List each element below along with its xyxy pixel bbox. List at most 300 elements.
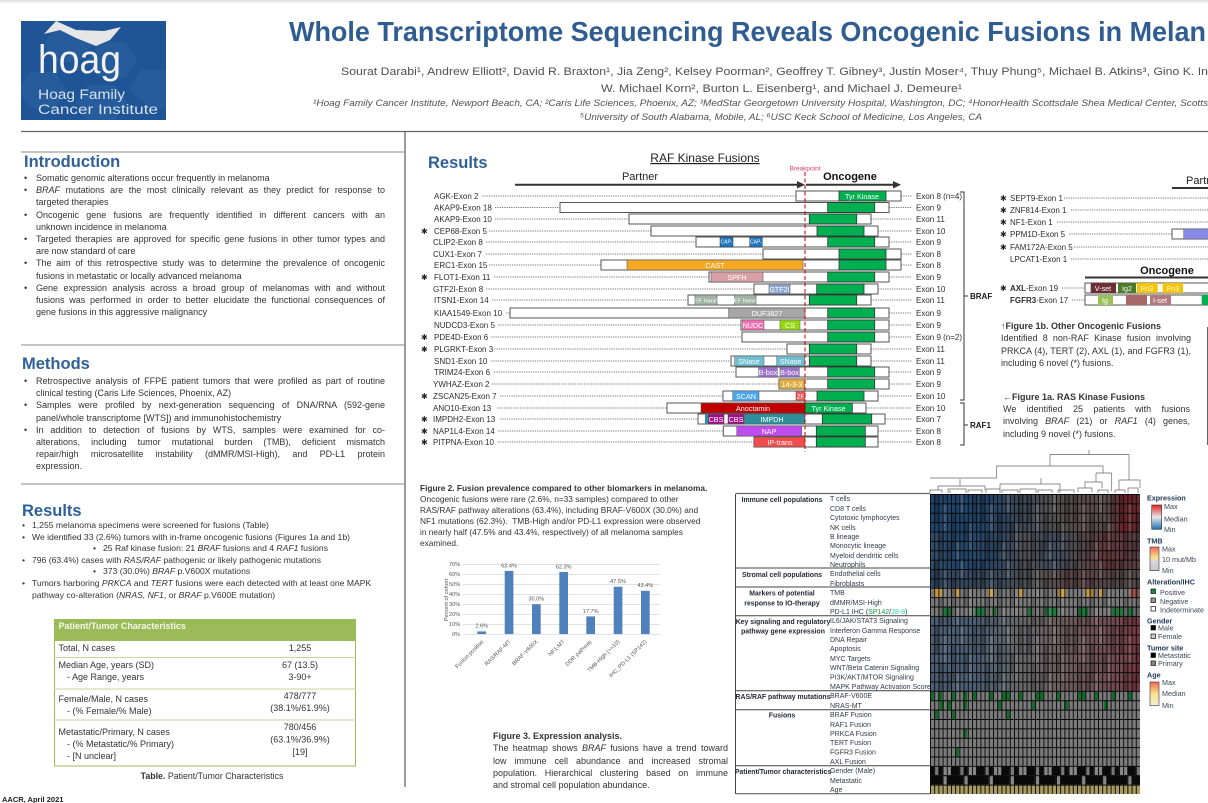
- row labels: Interferon Gamma Response: [830, 628, 920, 635]
- legend: alteration IHC: Negative: [1160, 597, 1188, 606]
- table header: Patient/Tumor Characteristics: [58, 621, 186, 631]
- fusion row: ERC1: ERC1-Exon 15: [434, 261, 488, 270]
- fusion row: AKAP9 exon 10: [434, 214, 945, 224]
- text block: figure 3 caption: and stromal cell population abundance.: [493, 780, 650, 790]
- row labels: DNA Repair: [830, 637, 868, 644]
- text block: figure 3 caption: Figure 3. Expression analysis.: [493, 731, 622, 741]
- text block: methods bullets: clinical testing (Caris Life Sciences, Phoenix, AZ): [36, 388, 231, 398]
- text block: methods bullets: panel/whole transcriptome [WTS]) and immunohistochemistry: [36, 413, 281, 423]
- fusion row: NF1: NF1-Exon 1: [1010, 218, 1053, 227]
- authors and affiliations: [313, 66, 1208, 123]
- fusion row: PDE4D: PDE4D-Exon 6: [434, 333, 489, 342]
- fusion row: PITPNA: PITPNA-Exon 10: [433, 438, 494, 447]
- category labels: [455, 639, 649, 679]
- fusion row: ZSCAN25: [421, 391, 946, 401]
- row labels: Metastatic: [830, 778, 862, 785]
- row labels: IL6/JAK/STAT3 Signaling: [830, 618, 908, 625]
- fusion row: IMPDH2: ✱: [421, 415, 428, 424]
- row: tumor site: [19]: [292, 747, 308, 757]
- text block: introduction bullets: Oncogenic gene fusions are frequently identified in different cancers with an: [36, 210, 385, 220]
- panel: heatmap row annotation table: [735, 494, 931, 794]
- legend: age: Age: [1147, 670, 1161, 680]
- fusion row: CEP68: Exon 10: [916, 227, 946, 236]
- legend: TMB: Max: [1162, 544, 1176, 554]
- fusion row: NF1: ✱: [1000, 218, 1007, 227]
- text: •: [24, 376, 27, 386]
- partner header arrow: Partner: [622, 171, 658, 183]
- text: •: [22, 578, 25, 588]
- fusion row spots: [934, 710, 1010, 756]
- row labels: Monocytic lineage: [830, 543, 886, 550]
- text block: introduction bullets: [24, 173, 385, 317]
- fusion row: TRIM24: B-box: [780, 368, 799, 377]
- y axis labels: 60%: [449, 572, 460, 578]
- fusion row: NUDCD3: NUDC: [743, 321, 763, 330]
- legend: gender: Male: [1158, 624, 1174, 632]
- fusion row: AXL: ✱: [1000, 284, 1007, 293]
- fusion row: ANO10: Anoctamin: [736, 404, 770, 413]
- text: •: [24, 210, 27, 220]
- fusion row: NAP1L4: [421, 426, 941, 436]
- PD-L1 row spots: [943, 606, 1133, 616]
- heading: Introduction: Introduction: [24, 153, 120, 171]
- legend: gender: Female: [1158, 632, 1182, 641]
- group labels: RAS/RAF pathway mutations: [736, 694, 831, 701]
- authors and affiliations: Sourat Darabi¹, Andrew Elliott², David R. Braxton¹, Jia Zeng², Kelsey Poorman², Geoffrey T. Gibney³, Justin Moser⁴, Thuy Phung⁵, Michael B. Atkins³, Gino K. In: [341, 66, 1208, 78]
- category labels: IHC_PD-L1 (SP142): [608, 639, 649, 679]
- y axis labels: 40%: [449, 592, 460, 598]
- fusion row: AXL: V-set: [1095, 284, 1111, 293]
- bar value labels: 47.5%: [610, 579, 626, 585]
- fusion row: FGFR3: [1010, 295, 1208, 305]
- row labels: B lineage: [830, 534, 859, 541]
- age row: [930, 785, 1140, 794]
- text block: introduction bullets: The aim of this retrospective study was to determine the prevalence of oncogenic: [36, 258, 385, 268]
- legend: age: [1147, 670, 1186, 710]
- fusion row: CLIP2: Exon 9: [916, 238, 941, 247]
- row labels: [830, 496, 931, 794]
- fusion row: NAP1L4: NAP1L4-Exon 14: [433, 427, 495, 436]
- legend: alteration IHC: Positive: [1160, 588, 1185, 597]
- text block: introduction bullets: targeted therapies: [36, 197, 109, 207]
- text block: results bullets: •: [93, 543, 96, 553]
- fusion row: FLOT1: ✱: [421, 273, 428, 282]
- table caption: Table. Patient/Tumor Characteristics: [141, 771, 284, 781]
- text block: figure 2 caption: Oncogenic fusions were rare (2.6%, n=33 samples) compared to other: [420, 494, 678, 504]
- legend: expression: Max: [1164, 502, 1178, 511]
- row: total: 1,255: [289, 643, 311, 653]
- fusion row: KIAA1549: DUF3827: [752, 309, 782, 318]
- text block: introduction bullets: are now standard of care: [36, 246, 136, 256]
- legend: TMB: TMB: [1147, 536, 1163, 546]
- row: median age: - Age Range, years: [67, 672, 145, 682]
- y axis labels: 10%: [449, 622, 460, 628]
- fusion row: PLGRKT: Exon 11: [916, 345, 945, 354]
- fusion row: FAM172A: [1000, 243, 1208, 252]
- row: tumor site: (63.1%/36.9%): [270, 734, 330, 744]
- text block: figure 1a caption: We identified 25 patients with fusions: [1003, 404, 1190, 414]
- y axis labels: 50%: [449, 582, 460, 588]
- legend: alteration IHC: Indeterminate: [1160, 606, 1204, 614]
- text block: figure 1b caption: including 6 novel (*) fusions.: [1001, 358, 1114, 368]
- fusion row: ANO10: Tyr Kinase: [812, 404, 845, 413]
- y axis title: Percent of cohort: [444, 578, 450, 621]
- fusion row: ANO10: ANO10-Exon 13: [433, 404, 492, 413]
- bar value labels: 43.4%: [637, 583, 653, 589]
- fusion row: SEPT9: [1000, 194, 1208, 203]
- text block: figure 1a caption: involving BRAF (21) or RAF1 (4) genes,: [1003, 416, 1190, 426]
- row labels: AXL Fusion: [830, 759, 866, 766]
- fusion row: ZNF814: ZNF814-Exon 1: [1010, 206, 1067, 215]
- fusion row: PLGRKT: PLGRKT-Exon 3: [434, 345, 494, 354]
- row: total: Total, N cases: [58, 643, 116, 653]
- legend: TMB: Min: [1162, 566, 1174, 575]
- category labels: TMB-High (>=10): [587, 639, 622, 674]
- fusion row: CUX1: Exon 8: [916, 250, 941, 259]
- category labels: NF1-MT: [548, 639, 567, 658]
- text block: methods bullets: [24, 376, 385, 471]
- text: •: [24, 425, 27, 435]
- text block: figure 1b caption: Identified 8 non-RAF Kinase fusion involving: [1001, 333, 1191, 343]
- fusion row: ZSCAN25: ZSCAN25-Exon 7: [433, 392, 497, 401]
- bar value labels: 2.6%: [475, 624, 488, 630]
- logo: Hoag Family Cancer Institute: hoag: [38, 38, 121, 82]
- fusion row: PPM1D: PPM1D-Exon 5: [1010, 230, 1066, 239]
- fusion row: AGK: Tyr Kinase: [845, 192, 879, 201]
- text block: figure 2 caption: RAS/RAF pathway alterations (63.4%), including BRAF-V600X (30.0%) and: [420, 505, 698, 515]
- row: median age: [58, 660, 318, 682]
- fusion row: SND1: SNase: [738, 357, 760, 366]
- text block: figure 3 caption: population. Hierarchical clustering based on immune: [493, 768, 728, 778]
- fusion row: AKAP9 exon 18: Exon 9: [916, 204, 941, 212]
- text block: figure 2 caption: Figure 2. Fusion prevalence compared to other biomarkers in melanoma.: [420, 483, 707, 493]
- fusion row: PDE4D: Exon 9 (n=2): [916, 333, 962, 342]
- oncogene header arrow: Oncogene: [823, 171, 877, 183]
- fusion row: CUX1: [433, 249, 941, 259]
- bar value labels: 17.7%: [583, 609, 599, 615]
- row: gender: (38.1%/61.9%): [270, 703, 330, 713]
- bar value labels: 63.4%: [501, 564, 517, 570]
- y axis labels: [449, 562, 460, 638]
- row labels: FGFR3 Fusion: [830, 750, 876, 756]
- row: gender: 478/777: [284, 691, 316, 701]
- partner header: [1172, 175, 1208, 188]
- text block: introduction bullets: fusions was performed in order to better elucidate the functional consequences of: [36, 295, 385, 305]
- text block: methods bullets: Samples were profiled by next-generation sequencing of DNA/RNA (592-gene: [36, 400, 385, 410]
- row labels: PI3K/AKT/MTOR Signaling: [830, 674, 914, 682]
- heatmap: [930, 494, 1140, 794]
- oncogene header arrow: [806, 171, 901, 188]
- text: •: [22, 532, 25, 542]
- text block: figure 2 caption: NF1 mutations (62.3%). TMB-High and/or PD-L1 expression were observed: [420, 516, 700, 526]
- row labels: BRAF Fusion: [830, 712, 872, 719]
- fusion row: ZSCAN25: Exon 10: [916, 392, 946, 401]
- legend: expression: Expression: [1147, 494, 1186, 502]
- fusion row: CLIP2: [433, 237, 941, 247]
- text block: figure 1a caption: [1003, 392, 1190, 439]
- fusion row: ANO10: [433, 403, 946, 413]
- row labels: Myeloid dendritic cells: [830, 553, 899, 560]
- category labels: Fusion-positive: [455, 639, 485, 670]
- text block: methods bullets: repair/high microsatellite instability (dMMR/MSI-High), and PD-L1 protein: [36, 449, 385, 459]
- text: •: [24, 283, 27, 293]
- group labels: response to IO-therapy: [744, 600, 820, 608]
- fusion row: ITSN1: ITSN1-Exon 14: [434, 296, 489, 305]
- heading: Methods: Methods: [22, 355, 90, 373]
- row: tumor site: Metastatic/Primary, N cases: [58, 727, 170, 737]
- fusion row: KIAA1549: KIAA1549-Exon 10: [434, 309, 503, 318]
- text block: introduction bullets: unknown incidence in melanoma: [36, 222, 167, 232]
- text block: results bullets: Tumors harboring PRKCA and TERT fusions were each detected with at least one MAPK: [32, 578, 371, 588]
- row labels: Fibroblasts: [830, 581, 865, 588]
- row: gender: - (% Female/% Male): [67, 706, 152, 716]
- text block: results bullets: [22, 520, 371, 600]
- fusion row: GTF2I: [433, 284, 946, 294]
- fusion row: ZSCAN25: SCAN: [736, 392, 756, 401]
- row labels: CD8 T cells: [830, 506, 866, 513]
- fusion row: LPCAT1: LPCAT1-Exon 1: [1010, 255, 1068, 264]
- fusion row: ZNF814: ✱: [1000, 206, 1007, 215]
- fusion row: SEPT9: ✱: [1000, 194, 1007, 203]
- text block: methods bullets: alterations, including tumor mutational burden (TMB), deficient mismatch: [36, 437, 385, 447]
- metastatic row: [930, 775, 1140, 785]
- partner header arrow: [515, 171, 805, 188]
- text block: results bullets: 796 (63.4%) cases with RAS/RAF pathogenic or likely pathogenic mutations: [32, 555, 321, 565]
- fusion row: CEP68: [421, 226, 946, 236]
- bar value labels: 30.0%: [528, 596, 544, 602]
- fusion row: CLIP2: CAP-: [750, 240, 762, 246]
- legend: expression: Min: [1164, 525, 1176, 534]
- row: median age: 3-90+: [288, 672, 312, 682]
- text block: methods bullets: expression.: [36, 461, 82, 471]
- fusion row: ITSN1: EF Hand: [695, 298, 717, 304]
- legend: age: Max: [1162, 678, 1176, 687]
- fusion row: ZSCAN25: ✱: [421, 392, 428, 401]
- fusion row: AXL: AXL-Exon 19: [1010, 284, 1059, 293]
- y axis labels: 0%: [452, 632, 460, 638]
- heading: Results left: Results: [22, 502, 82, 520]
- row labels: NRAS-MT: [830, 703, 863, 710]
- text: •: [22, 520, 25, 530]
- oncogene header: Oncogene: [1140, 265, 1194, 277]
- legend: alteration IHC: Alteration/IHC: [1147, 578, 1195, 586]
- text block: figure 3 caption: [493, 731, 728, 790]
- group labels: Key signaling and regulatory: [736, 619, 830, 626]
- fusion row: AGK: [434, 191, 962, 201]
- group labels: Markers of potential: [749, 590, 815, 598]
- gender row: [930, 766, 1140, 775]
- fusion row: NUDCD3: Exon 9: [916, 321, 941, 330]
- row labels: Cytotoxic lymphocytes: [830, 515, 900, 522]
- text block: introduction bullets: Somatic genomic alterations occur frequently in melanoma: [36, 173, 270, 183]
- NRAS row spots: [940, 700, 1108, 710]
- fusion row: IMPDH2: Exon 7: [916, 415, 941, 424]
- fusion row: CUX1: CUX1-Exon 7: [433, 250, 482, 259]
- table header: [54, 619, 356, 641]
- fusion row: ITSN1: EF Hand: [734, 298, 756, 304]
- text: •: [24, 185, 27, 195]
- panel: RAF kinase fusions figure 1a: [421, 151, 992, 452]
- row labels: dMMR/MSI-High: [830, 600, 882, 607]
- row labels: PD-L1 IHC (SP142/28-8): [830, 609, 907, 616]
- fusion row: IMPDH2: [421, 414, 941, 424]
- authors and affiliations: ¹Hoag Family Cancer Institute, Newport Beach, CA; ²Caris Life Sciences, Phoenix, AZ; ³MedStar Georgetown University Hospital, Washington, DC; ⁴HonorHealth Scottsdale Shea Medical Center, Scotts: [313, 98, 1208, 109]
- legend: age: Median: [1162, 689, 1186, 698]
- fusion row: GTF2I: GTF2I-Exon 8: [433, 285, 484, 294]
- group labels: [735, 497, 831, 776]
- fusion row: TRIM24: [434, 367, 941, 377]
- fusion row: SND1: SND1-Exon 10: [434, 357, 488, 366]
- fusion row: PLGRKT: ✱: [421, 345, 428, 354]
- text block: figure 1b caption: PRKCA (4), TERT (2), AXL (1), and FGFR3 (1),: [1001, 346, 1191, 356]
- fusion row: IMPDH2: IMPDH: [760, 415, 784, 424]
- fusion row: ITSN1: [434, 295, 945, 305]
- fusion row: GTF2I: GTF2I: [769, 285, 790, 294]
- row: tumor site: - [N unclear]: [67, 751, 116, 761]
- fusion row: FAM172A: ✱: [1000, 243, 1007, 252]
- row labels: Age: [830, 787, 843, 794]
- fusion row: PITPNA: ✱: [421, 438, 428, 447]
- text block: introduction bullets: fusions in metastatic or locally advanced melanoma: [36, 271, 242, 281]
- TMB row spots: [934, 588, 1138, 597]
- logo: Hoag Family Cancer Institute: [18, 21, 166, 120]
- text block: figure 2 caption: [420, 483, 707, 548]
- text: •: [24, 400, 27, 410]
- fusion row: NUDCD3: [434, 320, 941, 330]
- row labels: MYC Targets: [830, 656, 871, 663]
- bar value labels: [475, 564, 653, 630]
- fusion row: AXL: [1000, 283, 1208, 293]
- text block: methods bullets: In addition to detection of fusions by WTS, samples were examined for co-: [36, 425, 385, 435]
- fusion row: AKAP9 exon 10: AKAP9-Exon 10: [434, 215, 492, 224]
- patient tumor characteristics table: [54, 619, 356, 766]
- bracket: RAF1: RAF1: [970, 421, 991, 430]
- text block: figure 3 caption: The heatmap shows BRAF fusions have a trend toward: [493, 743, 728, 753]
- legend: gender: [1147, 616, 1182, 641]
- fusion row: TRIM24: Exon 9: [916, 368, 941, 377]
- fusion row: IMPDH2: CBS: [729, 415, 744, 424]
- chart: fusion prevalence bar chart: [444, 562, 660, 679]
- bracket: BRAF: [960, 192, 992, 400]
- fusion row: PPM1D: [1000, 229, 1208, 239]
- legend: age: Min: [1162, 701, 1174, 710]
- row: tumor site: 780/456: [284, 722, 316, 732]
- fusion row: YWHAZ: YWHAZ-Exon 2: [433, 380, 490, 389]
- fusion row: PITPNA: IP-trans: [767, 438, 793, 447]
- fusion row: CLIP2: CLIP2-Exon 8: [433, 238, 483, 247]
- legend: tumor site: [1147, 644, 1191, 668]
- fusion row: FLOT1: FLOT1-Exon 11: [434, 273, 491, 282]
- row: tumor site: [58, 722, 330, 761]
- figure heading: RAF Kinase Fusions: [650, 151, 760, 165]
- fusion row: AXL: Ig2: [1122, 284, 1132, 293]
- fusion row: NAP1L4: NAP: [762, 427, 777, 436]
- legend: TMB: [1147, 536, 1196, 575]
- row: median age: 67 (13.5): [282, 660, 318, 670]
- legend: tumor site: Primary: [1158, 659, 1183, 668]
- fusion row: SND1: Exon 11: [916, 357, 945, 366]
- BRAF-V600E row spots: [930, 691, 1132, 700]
- text block: methods bullets: Retrospective analysis of FFPE patient tumors that were profiled as part of routine: [36, 376, 385, 386]
- text block: introduction bullets: Targeted therapies are approved for specific gene fusions in other tumor types and: [36, 234, 385, 244]
- text block: figure 1b caption: ↑Figure 1b. Other Oncogenic Fusions: [1001, 321, 1161, 331]
- group labels: pathway gene expression: [741, 628, 825, 636]
- y axis labels: 70%: [449, 562, 460, 568]
- text block: introduction bullets: BRAF mutations are the most clinically relevant as they predict for response to: [36, 185, 385, 195]
- legend: expression: Median: [1164, 514, 1188, 524]
- text block: figure 1a caption: including 9 novel (*) fusions.: [1003, 429, 1116, 439]
- fusion row: ZSCAN25: ZF: [797, 395, 804, 401]
- text block: results bullets: 1,255 melanoma specimens were screened for fusions (Table): [32, 520, 269, 530]
- fusion row: CLIP2: CAP-: [721, 240, 733, 246]
- text block: results bullets: 25 Raf kinase fusion: 21 BRAF fusions and 4 RAF1 fusions: [103, 543, 328, 553]
- text block: figure 1b caption: [1001, 321, 1191, 368]
- fusion row: PDE4D: [421, 332, 962, 342]
- row labels: T cells: [830, 496, 851, 503]
- fusion row: IMPDH2: CBS: [709, 415, 724, 424]
- fusion row: FLOT1: Exon 9: [916, 273, 941, 282]
- text block: introduction bullets: Gene expression analysis across a broad group of melanomas with and without: [36, 283, 385, 293]
- legend: tumor site: Tumor site: [1147, 644, 1183, 652]
- row labels: RAF1 Fusion: [830, 722, 871, 729]
- bracket: RAF1: [960, 403, 991, 445]
- bar value labels: 62.3%: [556, 564, 572, 570]
- fusion row: KIAA1549: Exon 9: [916, 309, 941, 318]
- fusion row: FAM172A: FAM172A-Exon 5: [1010, 243, 1073, 252]
- fusion row: TRIM24: TRIM24-Exon 6: [434, 368, 491, 377]
- fusion row: SEPT9: SEPT9-Exon 1: [1010, 194, 1063, 203]
- fusion row: SND1: [434, 356, 945, 366]
- text block: figure 2 caption: examined.: [420, 538, 458, 548]
- dendrogram: [930, 450, 1140, 493]
- text block: figure 2 caption: in nearly half (47.5% and 43.4%, respectively) of all melanoma samples: [420, 527, 683, 537]
- breakpoint marker: Breakpoint: [789, 166, 821, 172]
- category labels: RAS/RAF-MT: [484, 639, 513, 668]
- top edge shadow: [0, 0, 1208, 4]
- fusion row: FGFR3: FGFR3-Exon 17: [1010, 296, 1069, 305]
- fusion row: NUDCD3: NUDCD3-Exon 5: [434, 321, 495, 330]
- logo: Hoag Family Cancer Institute: Hoag Family: [38, 87, 125, 102]
- fusion row: ERC1: CAST: [705, 261, 725, 270]
- text block: introduction bullets: gene fusions in this aggressive malignancy: [36, 307, 207, 317]
- text block: figure 1a caption: ←Figure 1a. RAS Kinase Fusions: [1003, 392, 1145, 402]
- row labels: TERT Fusion: [830, 740, 871, 747]
- fusion row: PITPNA: [421, 437, 941, 447]
- text block: results bullets: pathway co-alteration (NRAS, NF1, or BRAF p.V600E mutation): [32, 590, 275, 600]
- row labels: WNT/Beta Catenin Signaling: [830, 665, 919, 672]
- fusion row: FLOT1: [421, 272, 941, 282]
- text block: results bullets: We identified 33 (2.6%) tumors with in-frame oncogenic fusions (Figures 1a and 1b): [32, 532, 350, 542]
- fusion row: ITSN1: Exon 11: [916, 296, 945, 305]
- fusion row: TRIM24: B-box: [759, 368, 778, 377]
- row: total: [58, 643, 311, 653]
- legend: gender: Gender: [1147, 616, 1172, 626]
- fusion row: NAP1L4: Exon 8: [916, 427, 941, 436]
- fusion row: AGK: Exon 8 (n=4): [916, 192, 962, 201]
- fusion row: NF1: [1000, 218, 1208, 227]
- text: •: [24, 234, 27, 244]
- fusion row: AKAP9 exon 18: [434, 202, 941, 212]
- row labels: MAPK Pathway Activation Score: [830, 684, 931, 691]
- fusion row: ERC1: [434, 260, 941, 270]
- fusion row: PPM1D: ✱: [1000, 230, 1007, 239]
- row labels: TMB: [830, 590, 845, 597]
- bracket: BRAF: BRAF: [970, 292, 992, 301]
- fusion row: GTF2I: Exon 10: [916, 285, 946, 294]
- fusion row: AXL: Fn3: [1141, 284, 1153, 293]
- fusion row: PITPNA: Exon 8: [916, 438, 941, 447]
- fusion row: ANO10: Exon 10: [916, 404, 946, 413]
